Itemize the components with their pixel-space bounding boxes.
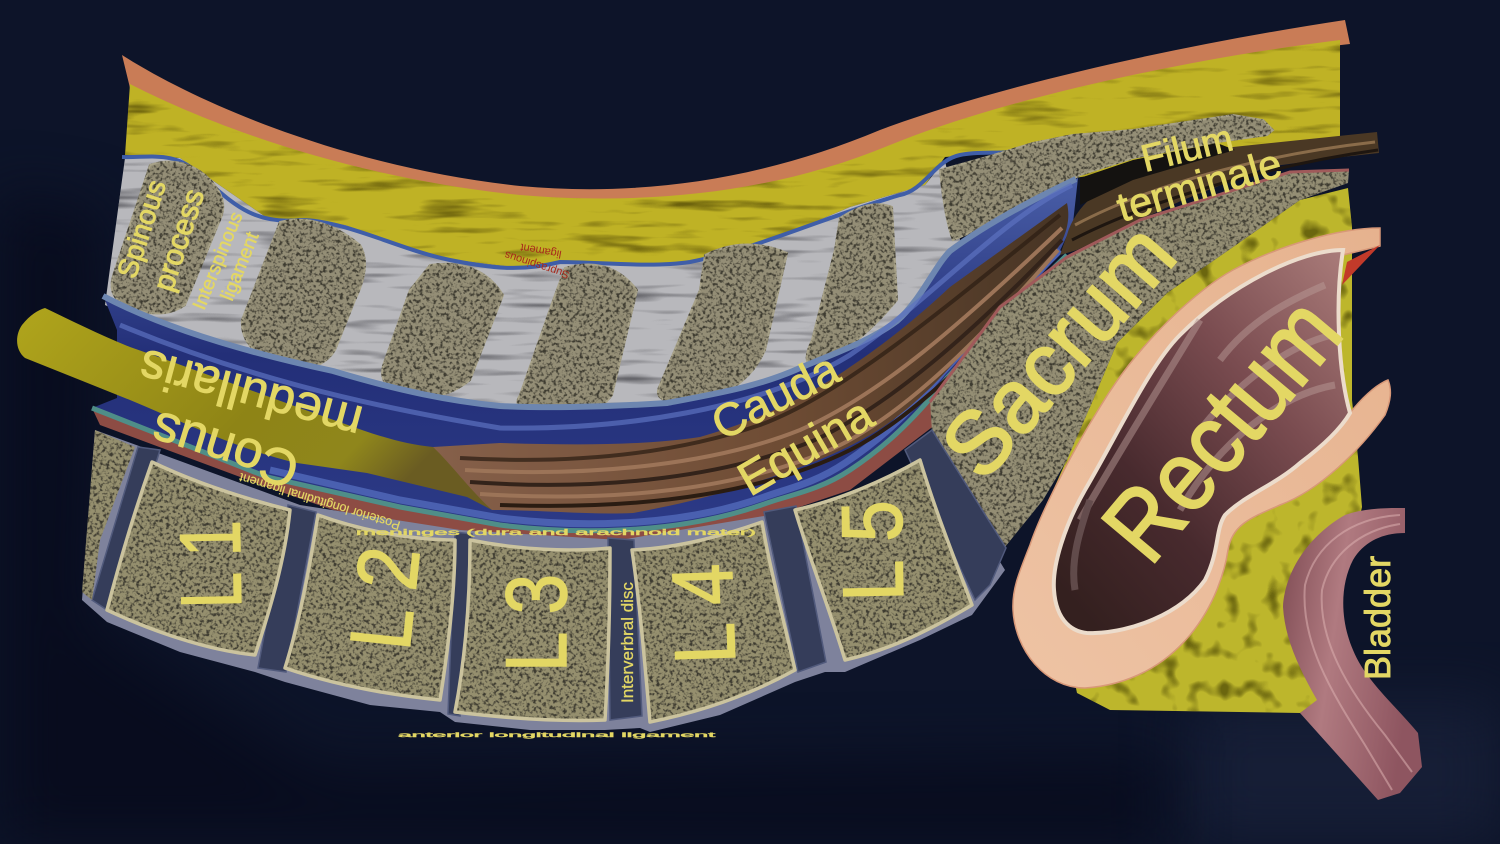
sacrum xyxy=(930,170,1349,547)
bone: spinous process 1 xyxy=(112,162,223,314)
vertebra rims xyxy=(107,460,972,722)
label: L1: L 1 xyxy=(162,520,260,609)
interspinous ligament region xyxy=(105,158,960,430)
label: Supraspinous ligament: Supraspinous xyxy=(503,248,571,281)
disc: L3-L4 xyxy=(608,538,642,720)
rectal wall xyxy=(1013,228,1390,688)
bladder xyxy=(1283,508,1422,800)
label: Bladder: Bladder xyxy=(1357,556,1398,680)
dura lavender stripe xyxy=(120,185,1072,428)
vertebra: partial T12 xyxy=(82,430,135,600)
bone: spinous process 3 xyxy=(382,264,503,396)
bone: upper sacrum xyxy=(940,115,1273,240)
bladder fibres xyxy=(1304,515,1412,790)
bone: spinous process 4 xyxy=(518,264,637,419)
skin layer xyxy=(122,20,1350,200)
label: Supraspinous ligament: ligament xyxy=(519,241,563,260)
disc: above L1 xyxy=(92,447,160,612)
disc: L4-L5 xyxy=(764,506,826,672)
bone: spinous process 6 xyxy=(807,204,897,368)
bone: spinous process 2 xyxy=(242,220,365,368)
label: L4: L 4 xyxy=(655,562,754,666)
filum fibres xyxy=(1072,142,1378,240)
teal meninges layer xyxy=(92,255,1067,531)
subcutaneous fat: upper xyxy=(125,40,1340,268)
label: anterior longitudinal ligament: anterior longitudinal ligament xyxy=(398,732,715,739)
teal dura highlight xyxy=(103,179,1076,407)
label: Spinous process xyxy=(111,176,211,295)
label: meninges: meninges (dura and arachnoid mater) xyxy=(356,528,756,537)
bone: spinous process 5 xyxy=(658,244,787,402)
background lighter lower right xyxy=(1190,700,1500,844)
supraspinous blue outline xyxy=(122,148,1030,268)
red tissue behind rectum xyxy=(1342,245,1380,285)
cauda equina xyxy=(433,203,1068,513)
label: Conus medullaris: medullaris xyxy=(133,338,368,451)
subcutaneous fat: lower xyxy=(1040,188,1362,713)
vertebra: L1 xyxy=(107,462,290,655)
label: Filum terminale: terminale xyxy=(1112,140,1287,231)
label: L2: L 2 xyxy=(332,543,439,654)
blue meninges layer xyxy=(270,250,1060,524)
label: Interverbral disc: Interverbral disc xyxy=(618,582,637,703)
disc: L1-L2 xyxy=(258,505,316,672)
spinous processes xyxy=(112,115,1273,419)
conus medullaris xyxy=(17,308,492,510)
label: Sacrum: Sacrum xyxy=(923,205,1195,497)
cauda nerve fibres xyxy=(460,215,1062,506)
disc: L5-sacrum xyxy=(905,430,1006,600)
bladder wall xyxy=(1283,508,1422,800)
filum terminale xyxy=(1060,132,1379,255)
lumbar vertebrae xyxy=(82,430,972,722)
label: Interspinous ligament: Interspinous xyxy=(189,209,247,313)
label: Cauda Equina: Equina xyxy=(728,386,882,506)
label: Spinous process: process xyxy=(147,185,211,295)
label: Filum terminale: Filum xyxy=(1137,118,1237,181)
dura sac xyxy=(92,178,1078,531)
vertebra: L4 xyxy=(632,522,795,722)
label: Cauda Equina xyxy=(703,342,882,506)
meninges band xyxy=(92,255,1067,548)
label: Cauda Equina: Cauda xyxy=(703,342,848,450)
label: L5: L 5 xyxy=(824,500,922,602)
intervertebral discs xyxy=(92,430,1006,720)
disc: L2-L3 xyxy=(448,532,472,716)
filum dark shadow xyxy=(1080,143,1235,205)
vertebral column base rim xyxy=(82,430,1005,732)
mucosal folds xyxy=(1074,285,1335,590)
label: Spinous process: Spinous xyxy=(111,176,172,282)
label: Interspinous ligament: ligament xyxy=(217,229,264,304)
label: Rectum: Rectum xyxy=(1081,277,1363,582)
label: Posterior longitudinal ligament: Posterior longitudinal ligament xyxy=(237,470,402,533)
label: L3: L 3 xyxy=(489,574,585,672)
vertebra: L3 xyxy=(455,540,610,721)
label: Conus medullaris: Conus xyxy=(145,400,306,499)
background shadow left and bottom xyxy=(0,195,1160,844)
rectum xyxy=(1013,228,1390,688)
vertebra: L5 xyxy=(795,460,972,660)
vertebra: L2 xyxy=(285,515,455,700)
rectal cavity xyxy=(1054,250,1350,633)
sacrum posterior ligament line xyxy=(930,170,1349,402)
